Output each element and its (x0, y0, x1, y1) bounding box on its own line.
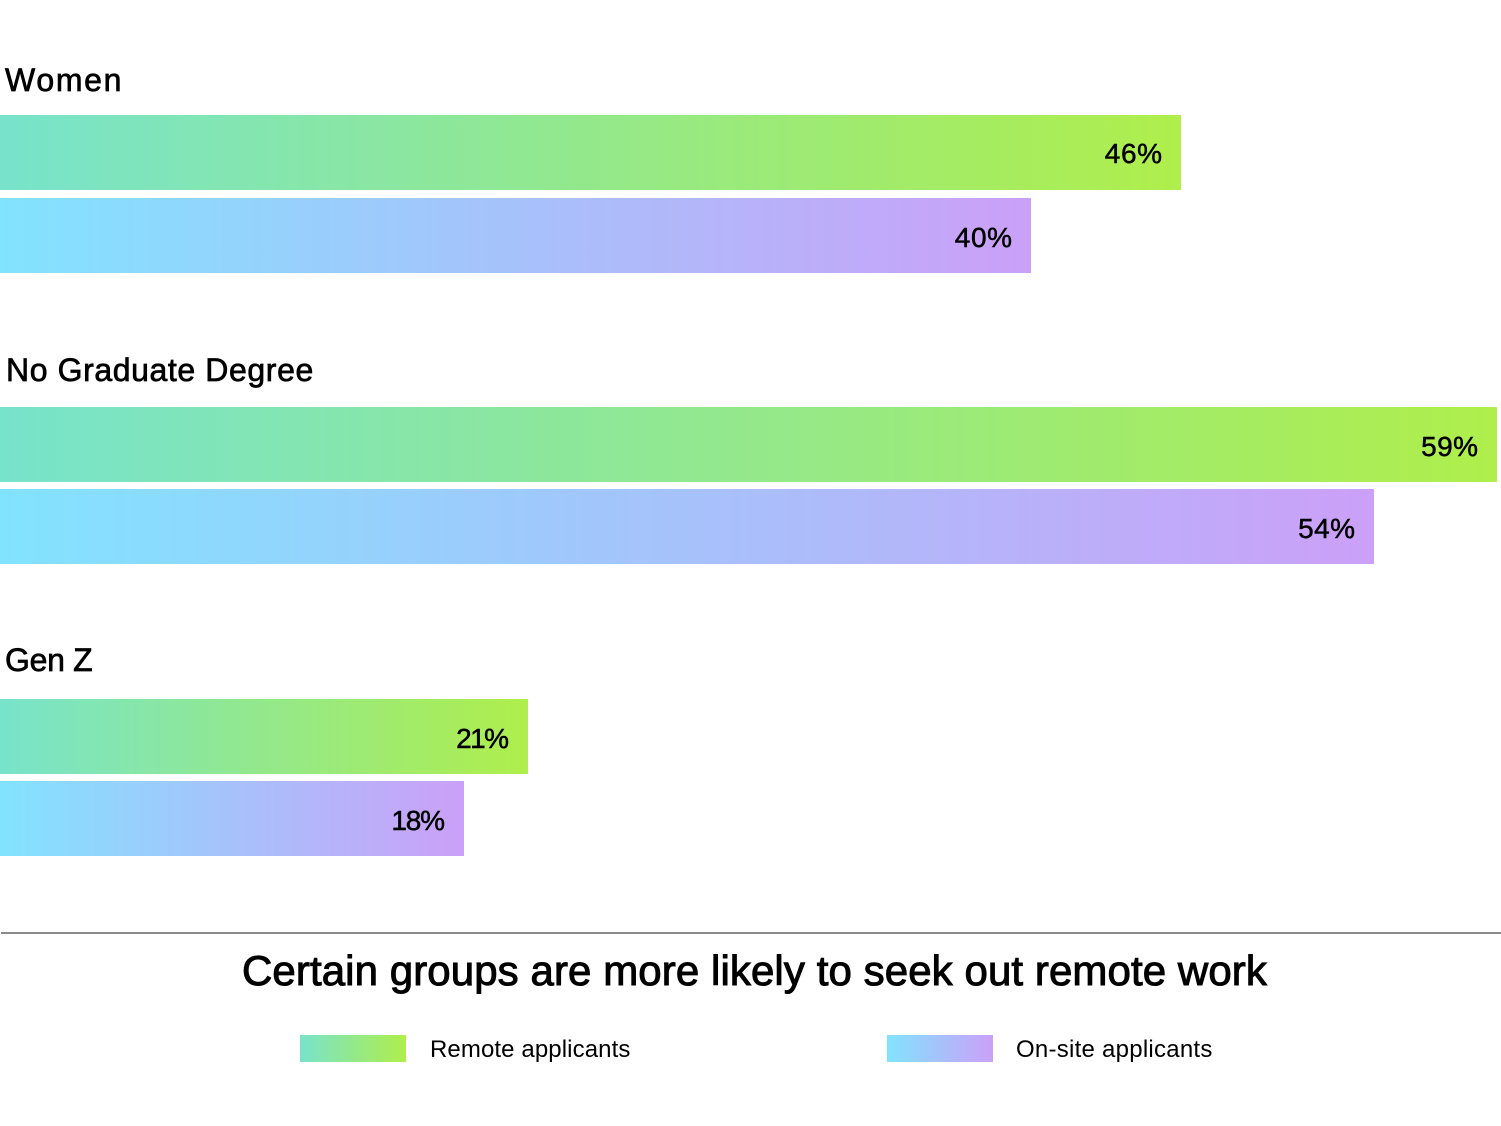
heading: Gen Z: Gen Z (5, 642, 92, 678)
legend label: remote: Remote applicants (430, 1036, 630, 1063)
bar: No Graduate Degree remote applicants 59%: 59% (1421, 431, 1478, 462)
bar: Gen Z remote applicants 21% (0, 699, 528, 774)
title: Certain groups are more likely to seek out remote work (242, 947, 1267, 994)
bar: No Graduate Degree remote applicants 59% (0, 407, 1497, 482)
bar: No Graduate Degree on-site applicants 54% (0, 489, 1374, 564)
bar: Women on-site applicants 40%: 40% (955, 222, 1013, 253)
bar: Women remote applicants 46% (0, 115, 1181, 190)
bar: Women on-site applicants 40% (0, 198, 1031, 273)
legend: remote applicants (300, 1035, 630, 1063)
heading: No Graduate Degree: No Graduate Degree (6, 352, 314, 388)
legend label: on-site: On-site applicants (1016, 1036, 1213, 1063)
legend swatch: on-site (887, 1035, 993, 1062)
bar: Gen Z on-site applicants 18% (0, 781, 464, 856)
bar: No Graduate Degree on-site applicants 54%: 54% (1298, 513, 1355, 544)
bar: Women remote applicants 46%: 46% (1105, 138, 1163, 169)
legend: on-site applicants (887, 1035, 1213, 1063)
heading: Women: Women (5, 62, 123, 98)
bar: Gen Z remote applicants 21%: 21% (456, 723, 507, 754)
legend swatch: remote (300, 1035, 406, 1062)
bar: Gen Z on-site applicants 18%: 18% (391, 805, 444, 836)
